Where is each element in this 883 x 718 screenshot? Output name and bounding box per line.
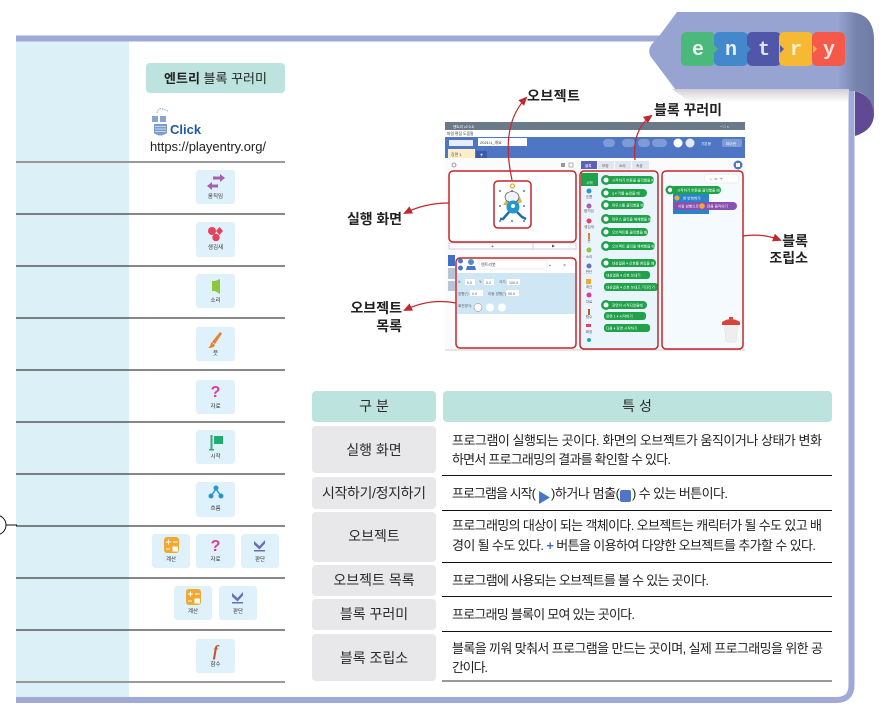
table header: 특 성 <box>622 398 652 414</box>
entry editor screenshot: 흐름 <box>586 194 593 199</box>
table descriptions: 프로그램을 시작( <box>452 486 537 501</box>
entry editor screenshot: 회전방식: <box>458 303 472 308</box>
entry editor screenshot: 움직임 <box>584 208 594 213</box>
entry editor screenshot: 마우스 클릭을 해제했을 때 <box>612 216 651 222</box>
entry logo blocks: y <box>823 39 835 62</box>
entry editor screenshot: X: <box>458 280 461 284</box>
entry logo blocks: r <box>790 39 802 62</box>
entry editor screenshot: 2021/1_개요 <box>480 139 502 145</box>
entry editor screenshot: ▪ <box>549 263 551 269</box>
entry editor screenshot: 100.0 <box>509 281 518 285</box>
entry editor screenshot: 90.0 <box>508 292 515 296</box>
icon: judge: 판단 <box>233 607 243 615</box>
entry editor screenshot: 번 반복하기 <box>683 196 701 200</box>
icon: start <box>196 430 235 464</box>
icon: judge: 판단 <box>255 555 265 563</box>
table row labels: 블록 조립소 <box>340 650 408 666</box>
entry editor screenshot: 소리 <box>619 163 626 168</box>
entry editor screenshot: 다음 ▾ 장면 시작하기 <box>606 326 637 330</box>
table row labels: 오브젝트 목록 <box>333 572 415 588</box>
arrow: object list <box>405 302 456 310</box>
table row labels <box>312 426 436 681</box>
table descriptions: )하거나 멈출( <box>551 486 621 501</box>
entry editor screenshot: × <box>563 263 566 269</box>
entry editor screenshot: 엔트리봇 <box>481 261 496 267</box>
arrow: block assembly <box>743 235 780 240</box>
entry editor screenshot: 모양 <box>602 163 609 168</box>
entry editor screenshot: 마우스를 클릭했을 때 <box>612 202 644 208</box>
arrow: block palette <box>635 116 651 160</box>
entry editor screenshot: 계산 <box>586 284 593 289</box>
icon: motion <box>196 170 235 204</box>
icon: function <box>196 639 235 673</box>
entry editor screenshot: 0.0 <box>467 281 472 285</box>
label: block assembly: 조립소 <box>769 250 808 266</box>
table descriptions: 하면서 프로그래밍의 결과를 확인할 수 있다. <box>452 452 671 467</box>
icon: sound <box>196 274 235 308</box>
table descriptions: 간이다. <box>452 660 488 675</box>
icon: looks <box>196 222 235 257</box>
entry editor screenshot: 소리 <box>586 254 592 259</box>
entry editor screenshot: 시작 <box>586 180 593 185</box>
block list rules <box>16 162 285 682</box>
arrow: object <box>508 98 526 180</box>
icon: data: 자료 <box>210 555 221 563</box>
table row labels: 실행 화면 <box>346 442 402 458</box>
icon: flow <box>196 482 235 517</box>
icon: calculate: 계산 <box>166 555 176 563</box>
icon: brush <box>196 327 235 361</box>
label: run screen: 실행 화면 <box>347 211 402 227</box>
icon: judge <box>219 586 257 620</box>
icon: click link: https://playentry.org/ <box>150 139 266 154</box>
table descriptions <box>452 433 823 675</box>
entry editor screenshot: 대상없음 ▾ 신호 보내기 <box>606 272 641 278</box>
icon: start: 시작 <box>210 453 221 460</box>
icon: data <box>196 534 235 568</box>
label: object list: 목록 <box>376 318 402 334</box>
entry editor screenshot: 0.0 <box>486 281 491 285</box>
entry editor screenshot: 기본형 <box>701 141 711 146</box>
entry editor screenshot: 자료 <box>586 299 593 304</box>
label: object: 오브젝트 <box>527 88 580 104</box>
assembly blocks <box>704 174 739 183</box>
icon: click link <box>150 108 266 154</box>
mascot object <box>499 184 526 222</box>
table descriptions: 프로그램에 사용되는 오브젝트를 볼 수 있는 곳이다. <box>452 573 709 588</box>
entry editor screenshot: 판단 <box>586 269 593 274</box>
icon: function: f <box>213 643 220 660</box>
icon: calculate: 계산 <box>188 607 198 615</box>
icon: looks: 생김새 <box>208 243 223 251</box>
entry editor screenshot: 이동 방향(°): <box>488 291 507 296</box>
left column heading: 엔트리 블록 꾸러미 <box>164 71 267 86</box>
entry editor screenshot: 크기: <box>499 279 507 284</box>
entry editor screenshot: 시작하기 버튼을 클릭했을 때 <box>677 188 720 192</box>
icon: data <box>196 380 235 414</box>
table header: 구 분 <box>359 398 389 414</box>
icon: function: 함수 <box>210 660 221 668</box>
entry editor screenshot: 엔트리 v2.0.8 <box>453 124 474 129</box>
arrow: run screen <box>405 203 449 213</box>
entry editor screenshot: ─ □ × <box>719 125 729 129</box>
icon: calculate <box>174 586 212 620</box>
entry editor screenshot: 파일 편집 도움말 <box>447 131 474 136</box>
table descriptions: 경이 될 수도 있다. + 버튼을 이용하여 다양한 오브젝트를 추가할 수 있다. <box>452 538 816 553</box>
icon: data: ? <box>211 384 220 401</box>
table descriptions: 블록을 끼워 맞춰서 프로그램을 만드는 곳이며, 실제 프로그래밍을 위한 공 <box>452 641 823 656</box>
icon: data: 자료 <box>210 402 221 410</box>
entry editor screenshot: 만큼 움직이기 <box>707 204 728 208</box>
entry editor screenshot: + <box>491 244 494 250</box>
entry editor screenshot: 속성 <box>636 163 643 168</box>
table descriptions: 프로그램이 실행되는 곳이다. 화면의 오브젝트가 움직이거나 상태가 변화 <box>452 433 822 448</box>
entry editor screenshot: 파이썬 <box>726 141 736 146</box>
label: block assembly: 블록 <box>782 233 808 249</box>
table header <box>312 391 832 422</box>
icon: judge <box>241 534 279 568</box>
entry editor screenshot: + <box>480 153 484 159</box>
icon: sound: 소리 <box>210 296 221 304</box>
entry editor screenshot: 확장 <box>586 329 593 334</box>
left column heading <box>146 63 285 93</box>
icon: data: ? <box>211 538 220 555</box>
icon: click link: Click <box>170 122 202 137</box>
label: object list: 오브젝트 <box>350 300 402 316</box>
table descriptions: ) 수 있는 버튼이다. <box>632 486 728 501</box>
icon: brush: 붓 <box>213 349 218 357</box>
entry logo blocks <box>681 32 845 66</box>
entry editor screenshot: Y: <box>479 280 482 284</box>
icon: flow: 흐름 <box>210 505 221 512</box>
table row labels: 시작하기/정지하기 <box>322 485 426 501</box>
entry editor screenshot: 붓 <box>587 238 591 243</box>
entry editor screenshot: 장면 1 ▾ 시작하기 <box>606 314 633 318</box>
entry editor screenshot: 대상없음 ▾ 신호 보내고 기다리기 <box>606 284 655 290</box>
palette blocks <box>601 175 658 332</box>
entry editor screenshot: 시작하기 버튼을 클릭했을 때 <box>612 178 655 182</box>
icon: play button <box>539 491 550 504</box>
entry logo blocks: n <box>725 39 737 62</box>
red highlight frames <box>449 171 743 349</box>
trash can <box>722 317 740 342</box>
table row rules <box>442 476 832 681</box>
entry editor screenshot: 생김새 <box>584 224 594 229</box>
entry editor screenshot: 장면이 시작되었을때 <box>612 302 643 308</box>
entry editor screenshot: 오브젝트를 클릭했을 때 <box>612 230 647 234</box>
entry editor screenshot: 블록 <box>585 163 592 168</box>
entry editor screenshot <box>445 122 745 350</box>
entry logo blocks: t <box>758 39 770 62</box>
table row labels: 오브젝트 <box>348 528 400 544</box>
label: block palette: 블록 꾸러미 <box>654 102 722 118</box>
entry banner <box>649 12 874 136</box>
binding ring mark <box>0 515 17 535</box>
table descriptions: 프로그래밍의 대상이 되는 객체이다. 오브젝트는 캐릭터가 될 수도 있고 배 <box>452 518 822 533</box>
entry editor screenshot: 오브젝트 클릭을 해제했을 때 <box>612 244 655 248</box>
table descriptions: 프로그래밍 블록이 모여 있는 곳이다. <box>452 607 635 622</box>
entry logo blocks: e <box>692 39 704 62</box>
entry editor screenshot: 0.0 <box>472 292 477 296</box>
icon: stop button <box>620 490 631 502</box>
table row labels: 블록 꾸러미 <box>340 606 408 622</box>
entry editor screenshot: 장면 1 <box>451 151 462 157</box>
entry editor screenshot: 방향(°): <box>458 291 469 296</box>
entry editor screenshot: 이동 방향으로 <box>678 204 700 208</box>
icon: calculate <box>152 534 190 568</box>
entry editor screenshot: − = + <box>709 177 723 183</box>
entry editor screenshot: 함수 <box>586 314 593 319</box>
entry editor screenshot: q ▾ 키를 눌렀을 때 <box>612 190 640 196</box>
entry editor screenshot: 대상없음 ▾ 신호를 받았을 때 <box>612 260 654 266</box>
icon: motion: 움직임 <box>208 192 223 200</box>
